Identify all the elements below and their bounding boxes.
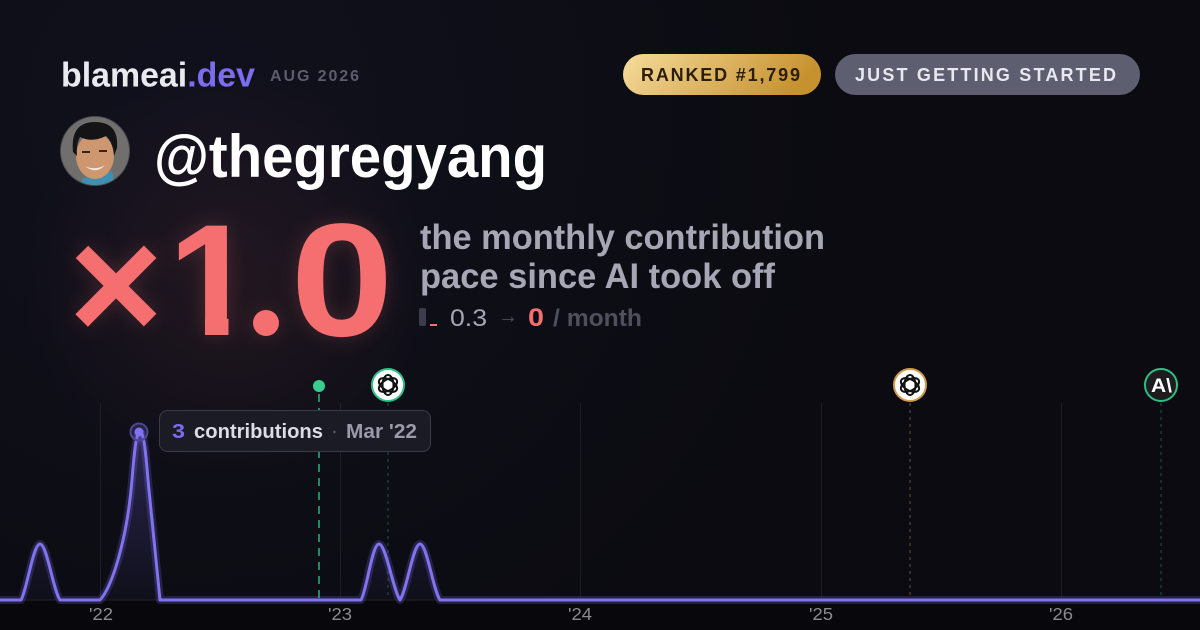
badge: status <box>835 54 1140 95</box>
year axis labels <box>89 604 1073 624</box>
monthly pace stats: 0.3 <box>450 305 487 332</box>
year axis labels: '22 <box>89 604 113 624</box>
badge: status: JUST GETTING STARTED <box>855 65 1116 85</box>
brand logo: blameai.dev <box>61 56 255 94</box>
peak marker <box>130 424 148 440</box>
date label: AUG 2026 <box>270 68 359 85</box>
event marker: OpenAI green <box>372 369 404 597</box>
year axis labels: '25 <box>809 604 833 624</box>
chart area fill <box>21 432 440 600</box>
tooltip: 3 <box>172 421 185 443</box>
event marker: Anthropic <box>1145 369 1177 597</box>
monthly pace stats: 0 <box>528 304 544 332</box>
multiplier glow <box>74 216 394 345</box>
tooltip: contributions <box>194 421 323 443</box>
multiplier glow: 0 <box>290 190 394 370</box>
monthly pace stats: / month <box>553 305 642 332</box>
tooltip <box>160 410 430 452</box>
monthly pace stats: → <box>498 303 518 328</box>
description <box>420 218 825 296</box>
description: the monthly contribution <box>420 218 825 257</box>
description: pace since AI took off <box>420 257 775 296</box>
badge: rank: RANKED #1,799 <box>641 65 800 85</box>
username: @thegregyang <box>154 123 547 190</box>
year grid lines <box>100 403 1062 600</box>
avatar <box>60 116 130 190</box>
year axis labels: '26 <box>1049 604 1073 624</box>
multiplier value: 1 <box>168 191 256 369</box>
multiplier glow: 1 <box>168 191 256 369</box>
icon: before and after mini bars <box>419 308 437 326</box>
multiplier value: × <box>69 194 163 375</box>
monthly pace stats <box>419 303 642 332</box>
multiplier glow: . <box>238 158 294 380</box>
event marker: OpenAI gold <box>894 369 926 597</box>
badge: rank <box>623 54 821 95</box>
chart line <box>0 432 1200 600</box>
multiplier glow: × <box>69 194 163 375</box>
year axis labels: '23 <box>328 604 352 624</box>
tooltip: Mar '22 <box>346 421 417 443</box>
multiplier value: 0 <box>290 190 394 370</box>
contribution line chart <box>0 432 1200 600</box>
event marker: AI takeoff <box>313 380 325 600</box>
chart line halo <box>0 432 1200 600</box>
year axis labels: '24 <box>568 604 592 624</box>
event marker: Anthropic: A\ <box>1151 376 1173 397</box>
multiplier value: . <box>238 158 294 380</box>
multiplier value <box>76 223 386 338</box>
